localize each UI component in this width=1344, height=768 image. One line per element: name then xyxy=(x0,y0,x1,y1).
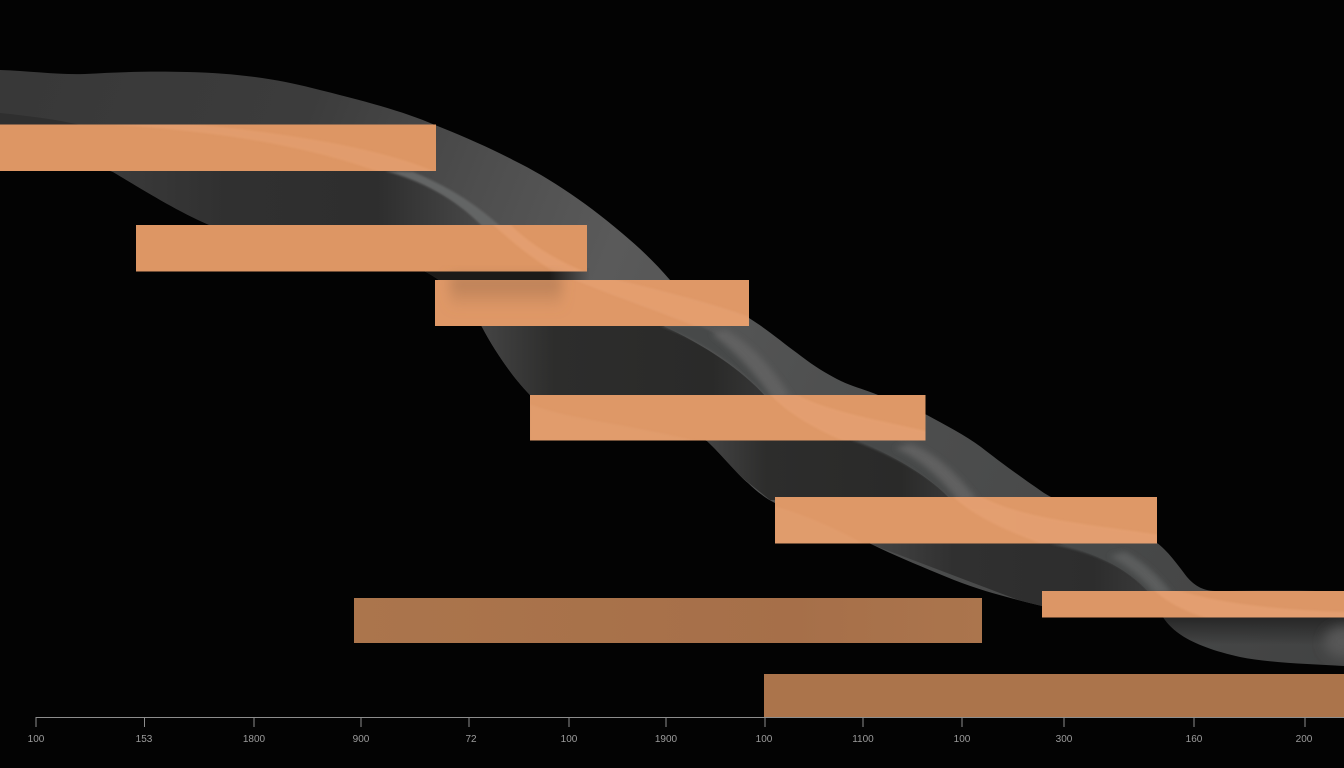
bar 7 muted xyxy=(354,598,982,643)
bar 2 xyxy=(136,225,587,272)
axis labels xyxy=(28,734,1313,745)
axis labels: 1100 xyxy=(852,734,874,745)
ribbon fold mid band 2 xyxy=(662,326,764,390)
ribbon dark fold 3 xyxy=(706,440,948,500)
bar 3 top shadow xyxy=(446,280,566,304)
bar 5 xyxy=(775,497,1157,544)
bar 8 muted xyxy=(764,674,1344,718)
axis labels: 153 xyxy=(136,734,153,745)
flowing gray ribbon xyxy=(0,70,1344,666)
ribbon fold highlight 1 xyxy=(385,171,500,226)
axis labels: 1900 xyxy=(655,734,678,745)
axis labels: 900 xyxy=(353,734,370,745)
ribbon dark fold 1 xyxy=(110,171,478,225)
axis labels: 100 xyxy=(561,734,578,745)
bar 1 xyxy=(0,124,436,171)
ribbon fold highlight 3 xyxy=(898,444,976,497)
axis labels: 160 xyxy=(1186,734,1203,745)
axis line xyxy=(36,716,1344,718)
gap shadow between bars 2 and 3 xyxy=(426,272,585,280)
bar 3 xyxy=(435,280,749,326)
axis labels: 300 xyxy=(1056,734,1073,745)
ribbon end highlight xyxy=(1324,626,1344,658)
axis labels: 1800 xyxy=(243,734,266,745)
axis labels: 200 xyxy=(1296,734,1313,745)
axis labels: 100 xyxy=(954,734,971,745)
bar 6 xyxy=(1042,591,1344,618)
ribbon fold highlight 4 xyxy=(1114,552,1170,591)
left lower ribbon sliver xyxy=(0,113,76,124)
axis labels: 100 xyxy=(28,734,45,745)
time axis xyxy=(28,717,1344,745)
ribbon dark fold 4 xyxy=(870,544,1147,606)
ribbon fold 5 shade xyxy=(1164,618,1344,638)
axis labels: 72 xyxy=(465,734,477,745)
ribbon fold mid band 3 xyxy=(853,440,918,472)
bar 4 xyxy=(530,395,926,440)
axis labels: 100 xyxy=(756,734,773,745)
ribbon dark fold 2 xyxy=(482,326,764,395)
ribbon fold mid band 4 xyxy=(1054,544,1109,563)
ribbon fold highlight 2 xyxy=(714,332,790,395)
axis ticks xyxy=(36,717,1305,727)
ribbon streaks showing through bars xyxy=(80,122,1344,620)
